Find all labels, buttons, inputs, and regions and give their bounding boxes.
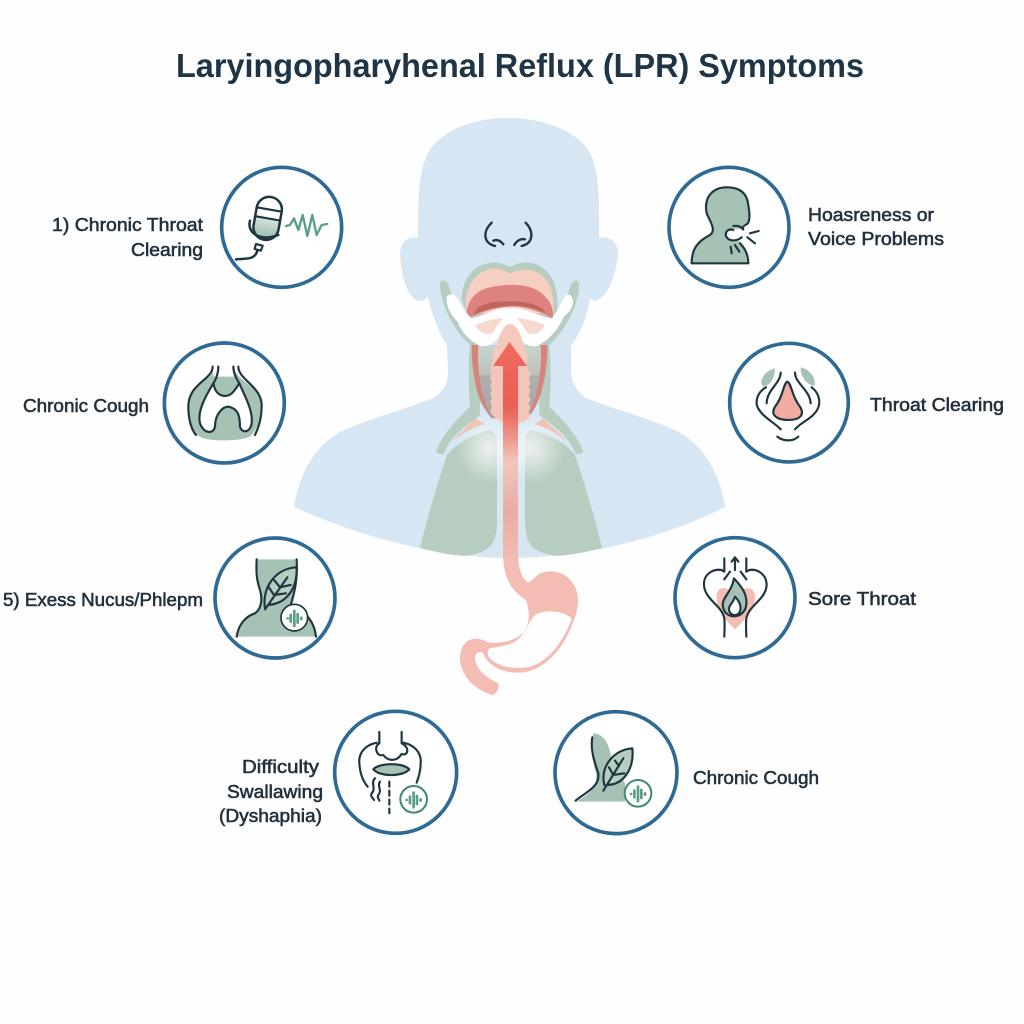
icon: throat with pink drop (730, 343, 848, 462)
panel: chronic cough right (555, 712, 819, 834)
body silhouette (294, 118, 725, 558)
label: Difficulty (242, 757, 319, 777)
panel: excess mucus (3, 538, 335, 658)
icon: throat cross-section (164, 343, 284, 463)
throat and mouth (436, 262, 583, 454)
panel: chronic throat clearing (52, 167, 342, 287)
label: (Dyshaphia) (219, 806, 322, 826)
panel: throat clearing right (730, 343, 1004, 462)
panel: sore throat (675, 538, 916, 658)
reflux arrow (493, 342, 527, 560)
label (52, 215, 203, 260)
nose (485, 223, 531, 246)
panel: hoarseness (669, 167, 944, 287)
icon: neck with leaf (215, 538, 335, 658)
panel: chronic cough left (23, 343, 284, 463)
label: Swallawing (227, 782, 323, 802)
label (808, 205, 944, 249)
label: Clearing (131, 240, 203, 260)
central anatomy figure (294, 118, 725, 695)
label: 5) Exess Nucus/Phlepm (3, 590, 203, 610)
label: Sore Throat (808, 589, 916, 609)
icon: mouth and nose (335, 711, 457, 833)
icon: plant and badge (555, 712, 677, 834)
label: Voice Problems (808, 229, 944, 249)
label: Throat Clearing (870, 395, 1004, 415)
icon: flame in throat (675, 538, 795, 658)
icon: microphone (222, 167, 342, 287)
label: 1) Chronic Throat (52, 215, 203, 235)
icon: person profile (669, 167, 789, 287)
label: Hoasreness or (808, 205, 934, 225)
lungs (420, 412, 602, 556)
label: Chronic Cough (23, 396, 149, 416)
label (219, 757, 323, 826)
panel: difficulty swallowing (219, 711, 457, 833)
stomach (460, 557, 578, 695)
title: Laryingopharyhenal Reflux (LPR) Symptoms (176, 47, 864, 84)
label: Chronic Cough (693, 768, 819, 788)
